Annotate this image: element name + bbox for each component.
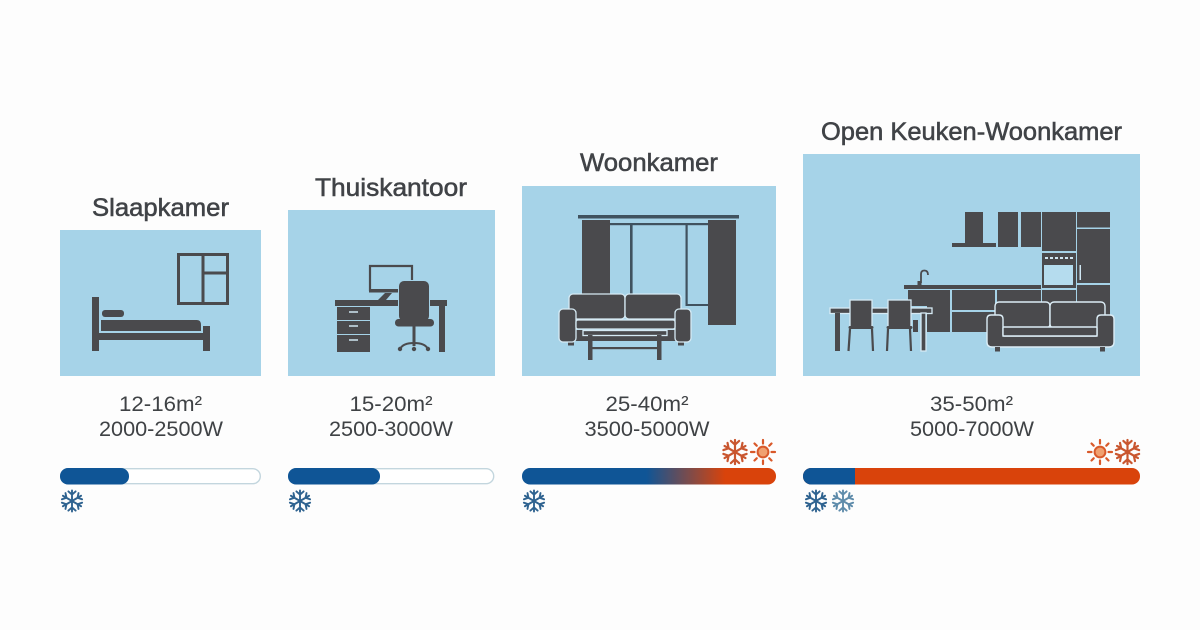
heading: Thuiskantoor: Thuiskantoor <box>315 174 467 202</box>
area and power: Thuiskantoor: 15-20m² <box>350 393 432 416</box>
capacity bar: Slaapkamer <box>60 468 260 484</box>
icon: sun <box>1088 440 1112 464</box>
icon: dining table and chairs <box>830 300 932 351</box>
panel: Slaapkamer <box>60 194 261 512</box>
heading: Woonkamer: Woonkamer <box>580 149 718 177</box>
icon: kitchen cabinets and oven <box>904 212 1110 332</box>
area and power: Open Keuken-Woonkamer <box>910 393 1034 441</box>
icon: snowflake <box>523 490 545 512</box>
room background: Woonkamer <box>522 186 776 376</box>
icon: snowflake <box>61 490 83 512</box>
icon: orange snowflake <box>722 440 748 464</box>
icon: curtains and window <box>578 215 739 325</box>
area and power: Woonkamer: 3500-5000W <box>584 418 710 441</box>
capacity bar: Open Keuken-Woonkamer <box>803 468 1140 484</box>
area and power: Woonkamer: 25-40m² <box>606 393 688 416</box>
area and power: Slaapkamer: 2000-2500W <box>99 418 223 441</box>
area and power: Woonkamer <box>584 393 710 441</box>
capacity bar: Woonkamer <box>522 468 776 484</box>
icon: snowflake <box>805 490 827 512</box>
icon: bed <box>92 297 210 351</box>
capacity bar: Thuiskantoor <box>288 468 494 484</box>
icon: sofa and coffee table <box>559 294 691 360</box>
icon: orange snowflake <box>1115 440 1140 464</box>
panel: Woonkamer <box>522 149 776 512</box>
area and power: Slaapkamer: 12-16m² <box>119 393 202 416</box>
area and power: Thuiskantoor <box>329 393 453 441</box>
area and power: Open Keuken-Woonkamer: 5000-7000W <box>910 418 1034 441</box>
icon: sun <box>751 440 775 464</box>
panel: Thuiskantoor <box>288 174 495 512</box>
area and power: Thuiskantoor: 2500-3000W <box>329 418 453 441</box>
icon: snowflake <box>289 490 311 512</box>
icon: light snowflake <box>832 490 854 512</box>
area and power: Open Keuken-Woonkamer: 35-50m² <box>930 393 1013 416</box>
heading: Slaapkamer: Slaapkamer <box>92 194 229 222</box>
room background: Open Keuken-Woonkamer <box>803 154 1140 376</box>
icon: window <box>178 254 228 304</box>
icon: desk with monitor and chair <box>335 266 447 352</box>
heading: Open Keuken-Woonkamer: Open Keuken-Woonkamer <box>821 118 1122 146</box>
icon: sofa <box>987 302 1114 352</box>
room background: Thuiskantoor <box>288 210 495 376</box>
room background: Slaapkamer <box>60 230 261 376</box>
panel: Open Keuken-Woonkamer <box>803 118 1140 512</box>
area and power: Slaapkamer <box>99 393 223 441</box>
